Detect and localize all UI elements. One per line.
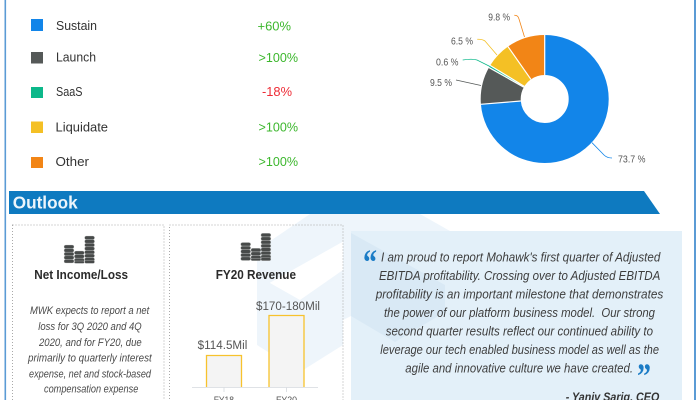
bar chart [192,301,320,400]
donut label: 73.7%: 73.7 % [618,154,646,166]
net income text block [27,305,152,395]
donut label: 6.5%: 6.5 % [451,35,473,47]
legend row: SaaS: SaaS [56,85,82,99]
net income text block: loss for 3Q 2020 and 4Q [38,321,142,333]
heading: net income/loss: Net Income/Loss [34,268,128,282]
icon: opening quote mark: “ [363,242,377,282]
legend row: Liquidate [31,120,298,135]
legend row: Other: >100% [258,154,298,169]
legend row: SaaS: -18% [262,84,292,99]
legend row: Sustain [31,18,291,34]
bar: FY20 [256,301,320,400]
quote text [375,251,663,375]
donut label: 6.5% [451,35,497,55]
donut label: 0.6% [436,57,490,69]
donut label: 0.6%: 0.6 % [436,57,458,69]
panel: net income/loss [12,225,164,400]
net income text block: expense, net and stock-based [29,368,152,380]
donut label: 9.8% [488,12,524,37]
donut label: 73.7% [592,143,646,166]
legend row: Other [31,154,298,169]
background watermark [257,214,450,372]
legend row: Launch [31,50,298,65]
donut label: 9.8%: 9.8 % [488,12,510,24]
quote text: EBITDA profitability. Crossing over to Adjusted EBITDA [379,269,660,283]
outlook heading bar [9,191,660,214]
icon: coin stacks [241,233,271,261]
bar: FY18: $114.5Mil [198,340,247,352]
page frame right edge [694,0,696,400]
legend row: Liquidate: Liquidate [56,121,108,135]
quote text: I am proud to report Mohawk's first quarter of Adjusted [381,251,661,265]
page frame left edge [4,0,6,400]
panel: FY20 revenue [170,225,343,400]
net income text block: primarily to quarterly interest [27,352,152,364]
legend row: Other: Other [56,155,89,169]
donut label: 9.5%: 9.5 % [430,77,452,89]
net income text block: 2020, and for FY20, due [38,337,142,349]
net income text block: compensation expense [44,383,138,395]
quote text: second quarter results reflect our continued ability to [386,324,653,338]
segment legend table [31,18,298,169]
outlook heading bar: Outlook [13,192,78,212]
legend row: Liquidate: >100% [258,120,298,134]
icon: closing quote mark: ” [637,356,651,396]
legend row: Sustain: +60% [258,18,291,34]
quote text: the power of our platform business model. Our strong [384,306,655,320]
bar: FY18 [198,340,247,400]
quote text: leverage our tech enabled business model as well as the [380,343,659,357]
quote text: agile and innovative culture we have created. [405,361,633,375]
donut label: 9.5% [430,77,481,89]
legend row: Launch: >100% [258,50,298,65]
heading: FY20 revenue: FY20 Revenue [216,268,296,282]
donut chart [480,34,589,143]
net income text block: MWK expects to report a net [30,305,150,317]
legend row: SaaS [31,84,292,99]
legend row: Launch: Launch [56,51,96,65]
panel: CEO quote [351,231,682,400]
icon: coin stacks [64,236,95,263]
legend row: Sustain: Sustain [56,19,97,33]
quote text: profitability is an important milestone that demonstrates [375,287,663,301]
bar: FY20: $170-180Mil [256,301,320,313]
